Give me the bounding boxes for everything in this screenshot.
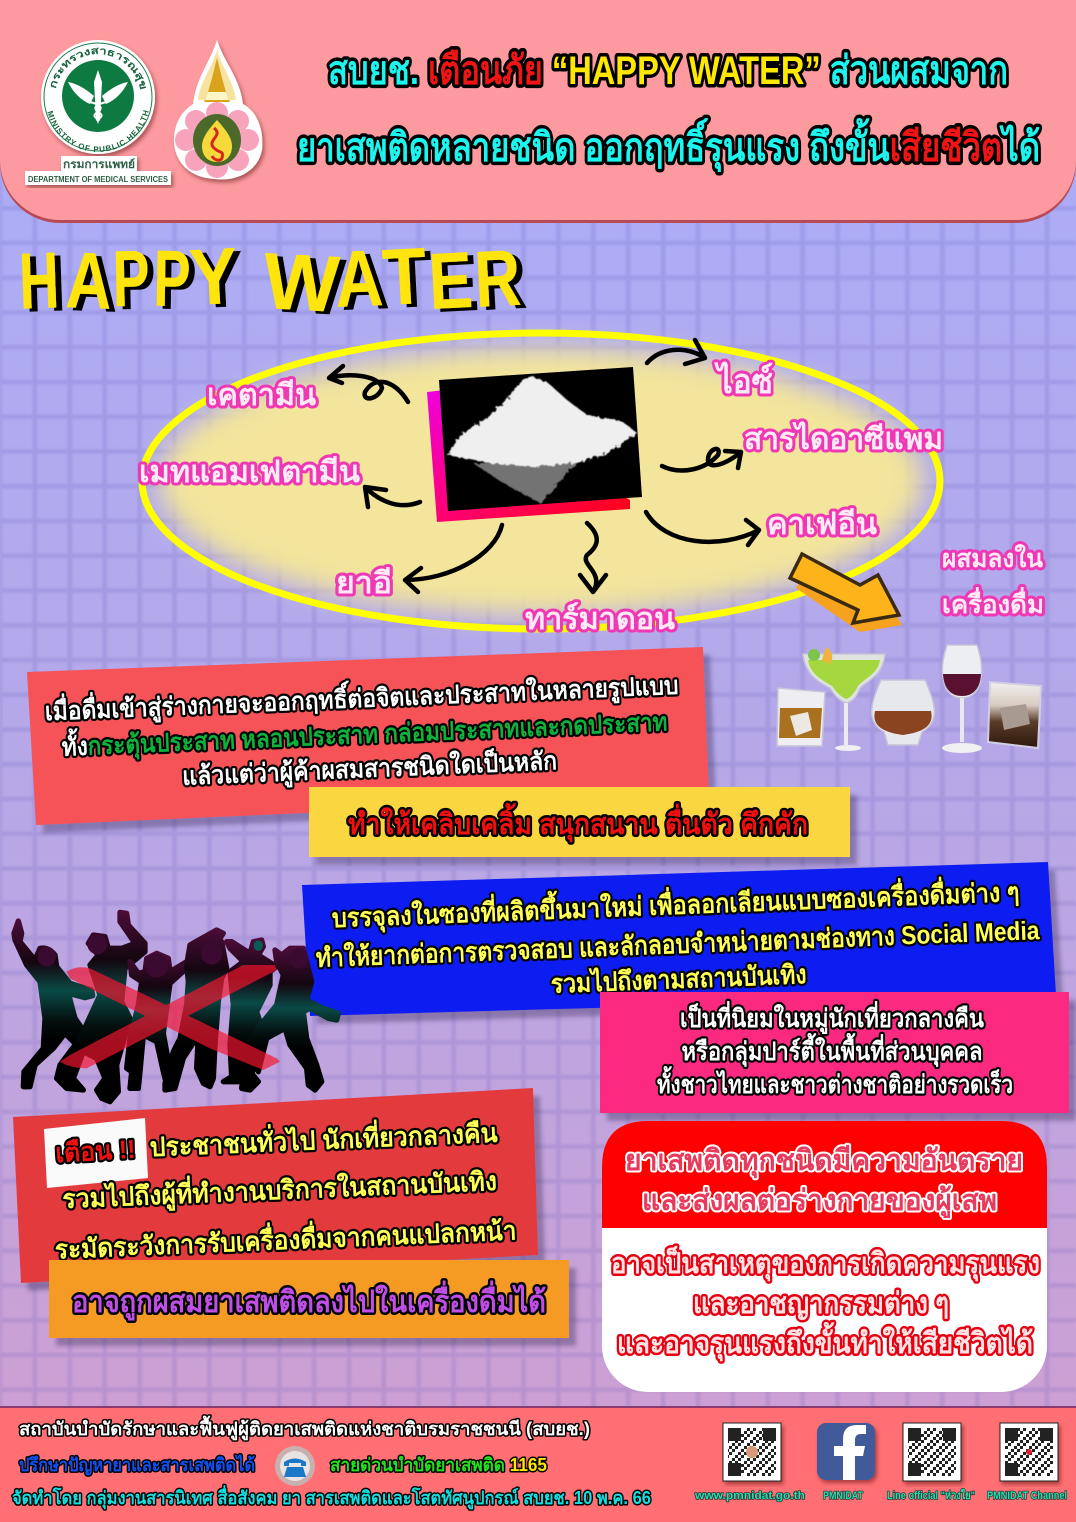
heading: happy water: Y — [187, 231, 240, 322]
caption: facebook: PMNIDAT — [823, 1490, 863, 1502]
callout: warning (orange): อาจถูกผสมยาเสพติดลงไปในเครื่องดื่มได้ — [72, 1280, 546, 1321]
logo label: department of medical services — [25, 156, 171, 185]
text: popularity description: เป็นที่นิยมในหมู่นักเที่ยวกลางคืน — [680, 1001, 984, 1035]
title: สบยช. เตือนภัย “HAPPY WATER” ส่วนผสมจาก — [328, 49, 1008, 93]
callout: warning (orange) — [49, 1260, 569, 1338]
footer: hotline: สายด่วนบำบัดยาเสพติด 1165 — [330, 1455, 547, 1475]
text: warning description: ประชาชนทั่วไป นักเที่ยวกลางคืน — [149, 1114, 498, 1162]
heading: happy water: H — [17, 235, 61, 326]
logo: ministry of public health: MINISTRY OF PUBLIC HEALTH — [47, 110, 149, 152]
text: warning description: รวมไปถึงผู้ที่ทำงานบริการในสถานบันเทิง — [62, 1162, 498, 1216]
glass: brandy — [872, 680, 934, 745]
glass: red wine — [942, 645, 982, 753]
text: packaging description: รวมไปถึงตามสถานบันเทิง — [550, 958, 807, 999]
arrow to caffeine — [646, 512, 759, 545]
ellipse diagram — [139, 333, 943, 636]
logo: institute crest — [174, 40, 262, 180]
icon: hotline telephone — [275, 1446, 315, 1486]
callout: effects (yellow): ทำให้เคลิบเคลิ้ม สนุกสนาน ตื่นตัว คึกคัก — [348, 802, 808, 842]
text: effects description: แล้วแต่ว่าผู้ค้าผสมสารชนิดใดเป็นหลัก — [182, 745, 558, 793]
panel: popularity (pink) — [600, 992, 1069, 1113]
label: tramadol: ทาร์มาดอน — [525, 602, 675, 636]
panel: warning (red) — [13, 1088, 538, 1283]
text: danger heading: ยาเสพติดทุกชนิดมีความอันตราย — [625, 1145, 1023, 1178]
label: ecstasy: ยาอี — [336, 567, 392, 600]
label: mixed into drinks: ผสมลงใน — [942, 543, 1043, 573]
orange arrow — [790, 554, 902, 632]
text: popularity description: หรือกลุ่มปาร์ตี้ในพื้นที่ส่วนบุคคล — [682, 1032, 982, 1068]
label: mixed into drinks: เครื่องดื่ม — [942, 587, 1044, 619]
footer band — [0, 1406, 1076, 1522]
logo: ministry of public health: กระทรวงสาธารณสุข — [50, 48, 146, 90]
text: popularity description — [657, 1001, 1013, 1099]
label: ice: ไอซ์ — [714, 361, 773, 401]
glass: iced coffee — [988, 682, 1041, 748]
arrow to tramadol — [580, 523, 606, 592]
text: danger details — [611, 1245, 1040, 1361]
heading: happy water: P — [153, 234, 191, 323]
callout: effects (yellow) — [309, 787, 850, 857]
heading: happy water: T — [380, 231, 429, 322]
text: danger heading — [625, 1145, 1023, 1218]
text: effects description: ทั้งกระตุ้นประสาท หลอนประสาท กล่อมประสาทและกดประสาท — [61, 702, 668, 764]
text: warning description — [54, 1114, 517, 1265]
footer: institute name: สถาบันบำบัดรักษาและฟื้นฟูผู้ติดยาเสพติดแห่งชาติบรมราชชนนี (สบยช.) — [19, 1415, 590, 1441]
footer: credit: จัดทำโดย กลุ่มงานสารนิเทศ สื่อสังคม ยา สารเสพติดและโสตทัศนูปกรณ์ สบยช. 10 พ.ค. 66 — [12, 1485, 651, 1510]
text: warning description: ระมัดระวังการรับเครื่องดื่มจากคนแปลกหน้า — [54, 1211, 517, 1265]
text: packaging description: บรรจุลงในซองที่ผลิตขึ้นมาใหม่ เพื่อลอกเลียนแบบซองเครื่องดื่มต่าง ๆ — [331, 872, 1020, 935]
glass: whisky — [777, 688, 825, 746]
label: ketamine: เคตามีน — [207, 379, 316, 412]
heading: happy water: R — [472, 233, 523, 324]
text: danger details: และอาจรุนแรงถึงขั้นทำให้เสียชีวิตได้ — [617, 1321, 1033, 1361]
panel: packaging (blue) — [302, 862, 1056, 1016]
caption: website: www.pmnidat.go.th — [694, 1490, 805, 1502]
tag: warning: เตือน !! — [55, 1134, 136, 1168]
logo: ministry of public health — [40, 40, 160, 156]
arrow to diazepam — [662, 449, 741, 470]
text: danger heading: และส่งผลต่อร่างกายของผู้เสพ — [642, 1185, 997, 1218]
caption: line official: Line official "ห่วงใย" — [887, 1488, 975, 1502]
title: ยาเสพติดหลายชนิด ออกฤทธิ์รุนแรง ถึงขั้นเสียชีวิตได้ — [297, 118, 1040, 173]
heading: happy water — [17, 231, 523, 329]
glass: margarita — [803, 647, 885, 751]
heading: happy water: A — [64, 235, 113, 326]
icons: drinks — [777, 645, 1041, 753]
logo label: department of medical services: DEPARTMENT OF MEDICAL SERVICES — [28, 175, 169, 184]
label: mixed into drinks — [942, 543, 1044, 619]
heading: happy water: W — [261, 236, 342, 329]
qr code: line official — [903, 1423, 961, 1481]
qr code: website — [723, 1423, 781, 1481]
panel: danger box — [602, 1121, 1047, 1392]
heading: happy water: P — [112, 234, 150, 323]
heading: happy water: A — [334, 233, 385, 324]
arrow to methamphetamine — [365, 487, 420, 507]
heading: happy water: E — [426, 235, 475, 326]
arrow to ice — [647, 340, 705, 364]
text: effects description — [44, 666, 679, 793]
header band — [0, 0, 1076, 223]
label: diazepam: สารไดอาซีแพม — [744, 421, 943, 456]
footer: consult: ปรึกษาปัญหายาและสารเสพติดได้ — [19, 1454, 255, 1476]
tag: warning — [44, 1118, 148, 1188]
arrow to ecstasy — [405, 525, 502, 592]
photo: white powder — [427, 367, 642, 522]
panel: effects (red) — [27, 647, 709, 825]
title — [297, 49, 1040, 173]
text: effects description: เมื่อดื่มเข้าสู่ร่างกายจะออกฤทธิ์ต่อจิตและประสาทในหลายรูปแบบ — [44, 666, 679, 728]
text: packaging description — [315, 872, 1040, 999]
label: caffeine: คาเฟอีน — [767, 508, 878, 541]
logo label: department of medical services: กรมการแพทย์ — [63, 158, 135, 171]
label: methamphetamine: เมทแอมเฟตามีน — [139, 456, 360, 489]
illustration: dancers crossed out — [14, 912, 338, 1102]
text: danger details: และอาชญากรรมต่าง ๆ — [693, 1288, 949, 1321]
icon: facebook — [817, 1423, 875, 1480]
qr code: channel — [1000, 1423, 1058, 1481]
arrow to ketamine — [329, 366, 408, 402]
